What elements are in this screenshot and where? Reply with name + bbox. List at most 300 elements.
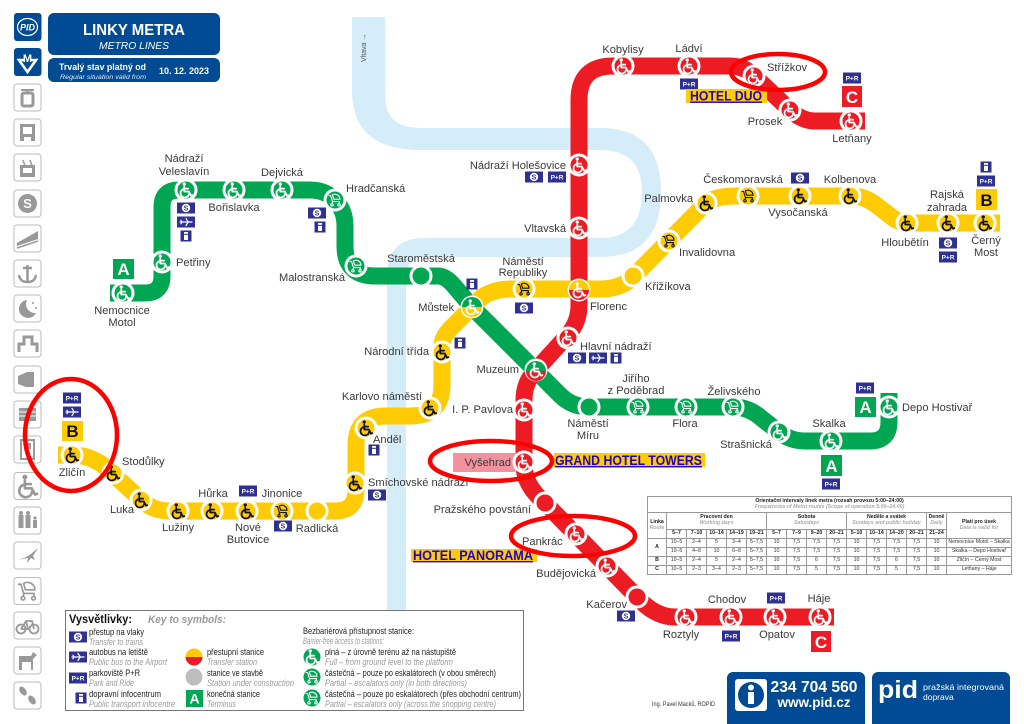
frequency table: 7,5: [913, 539, 920, 545]
tag: info Národní třída: [454, 338, 466, 348]
station: Nádraží Veleslavín: Nádraží: [165, 153, 204, 165]
legend: barrier-free heading: Barrier-free access to stations:: [303, 636, 384, 647]
frequency table: 10: [934, 566, 939, 572]
legend: park and ride: parkoviště P+R: [89, 668, 140, 679]
transfer station: Můstek: Můstek: [418, 302, 454, 314]
metro line C (red): [524, 66, 865, 617]
frequency table: 10–5: [671, 548, 682, 554]
contact box: phone and website: 234 704 560: [770, 679, 858, 696]
sidebar: transport mode icons: [14, 13, 42, 709]
station: Depo Hostivař: Depo Hostivař: [902, 402, 973, 414]
frequency table: 10–5: [671, 557, 682, 563]
frequency table: B: [655, 557, 659, 563]
legend: station under construction: stanice ve stavbě: [207, 668, 263, 679]
frequency table: 10: [854, 557, 859, 563]
icon: ticket machine: [14, 436, 41, 463]
terminus sign: C Háje: [811, 631, 831, 652]
tag: train Veleslavín: [177, 202, 195, 214]
frequency table: Working days: [700, 520, 733, 526]
frequency table: Neděle a svátek: [867, 514, 906, 520]
frequency table: 7,5: [813, 548, 820, 554]
icon: metro: [14, 48, 42, 76]
frequency table: 7,5: [793, 566, 800, 572]
station: Hradčanská: Hradčanská: [346, 183, 406, 195]
tag: P+R Rajská zahrada: [939, 252, 957, 262]
station: Jinonice: [262, 488, 302, 521]
frequency table: 4–8: [692, 548, 701, 554]
station: Pankrác: [522, 524, 586, 548]
station: Kačerov: Kačerov: [586, 599, 627, 611]
hotel label: Hotel Duo: HOTEL DUO: [690, 88, 762, 104]
header: title box: [48, 13, 220, 55]
legend: partial escalators: Partial – escalators only (in both directions): [325, 678, 467, 689]
tag: info Hradčanská: [314, 222, 326, 232]
frequency table: Frequencies of Metro routes (Scope of operation 5:00–24:00): [755, 504, 904, 510]
tag: P+R Skalka: [822, 478, 840, 490]
icon: charging: [14, 366, 41, 393]
icon: ferry anchor: [14, 260, 41, 287]
frequency table: A: [655, 544, 659, 550]
station: Pražského povstání: Pražského povstání: [434, 504, 532, 516]
frequency table: 10: [854, 539, 859, 545]
tag: train Veleslavín: S: [184, 206, 189, 212]
frequency table: Sobota: [798, 514, 815, 520]
station: Vltavská: [524, 218, 589, 238]
frequency table: Data is valid for: [960, 524, 998, 530]
frequency table: Route: [650, 524, 664, 530]
icon: family: [14, 507, 41, 534]
icon: funicular: [14, 225, 41, 252]
tag: airport bus Veleslavín: [177, 216, 195, 228]
tag: P+R Letňany: P+R: [846, 76, 859, 82]
frequency table: 10: [774, 548, 779, 554]
icon: train: S: [23, 196, 32, 211]
station: Náměstí Míru: Náměstí: [567, 418, 610, 430]
frequency table: 3–4: [732, 539, 741, 545]
red circle: Střížkov: [731, 54, 825, 90]
station: Vysočanská: [768, 186, 829, 219]
station: Prosek: Prosek: [748, 116, 783, 128]
frequency table: 5–7,5: [750, 566, 763, 572]
tag: train Náměstí Republiky: S: [522, 306, 527, 312]
legend: full access: Full – from ground level to the platform: [325, 657, 453, 668]
frequency table: 10: [774, 539, 779, 545]
icon: PID logo: [14, 13, 42, 41]
legend: full access: plná – z úrovně terénu až na nástupiště: [325, 647, 456, 658]
tag: P+R Depo Hostivař: P+R: [859, 386, 872, 392]
contact box: phone and website: www.pid.cz: [777, 694, 850, 710]
tag: P+R Skalka: P+R: [825, 482, 838, 488]
station: Střížkov: [744, 62, 808, 86]
frequency table: 21–24: [929, 530, 944, 536]
legend: trains: S: [76, 634, 81, 642]
tag: P+R Holešovice: P+R: [551, 174, 564, 182]
station: Nádraží Veleslavín: [159, 153, 209, 200]
station: Invalidovna: Invalidovna: [679, 247, 736, 259]
legend: airport bus: autobus na letiště: [89, 647, 148, 658]
station: Chodov: [708, 594, 747, 627]
river label: Vltava →: [361, 34, 368, 62]
tag: P+R Ládví: P+R: [683, 82, 696, 88]
station: Zličín: [59, 445, 85, 479]
frequency table: 20–21: [829, 530, 844, 536]
station: Bořislavka: [208, 180, 260, 214]
frequency table: 10–5: [671, 539, 682, 545]
station: Želivského: [707, 385, 761, 417]
station: Anděl: Anděl: [373, 434, 401, 446]
legend: park and ride: P+R: [72, 676, 85, 682]
station: Černý Most: [971, 213, 1001, 259]
frequency table: 9–20: [811, 530, 822, 536]
legend: park and ride: [69, 668, 140, 689]
station: Staroměstská: [387, 253, 456, 286]
station: Kolbenova: Kolbenova: [824, 174, 877, 186]
icon: wheelchair: [14, 472, 41, 500]
tag: P+R Depo Hostivař: [856, 382, 874, 394]
legend: park and ride: Park and Ride: [89, 678, 134, 689]
frequency table: 5–10: [851, 530, 862, 536]
terminus sign: A Nemocnice Motol: [113, 259, 134, 279]
tag: P+R Nové Butovice: P+R: [242, 488, 255, 496]
legend: terminus: A: [189, 690, 200, 706]
icon: steps: [14, 330, 41, 357]
tag: train Hradčanská: [308, 208, 326, 218]
station: Radlická: Radlická: [296, 523, 339, 535]
station: Českomoravská: [703, 173, 784, 206]
station: Náměstí Míru: Míru: [577, 430, 599, 442]
frequency table: 7,5: [793, 548, 800, 554]
station: Bořislavka: Bořislavka: [208, 202, 260, 214]
station: Roztyly: Roztyly: [663, 629, 700, 641]
frequency table: 5–7,5: [750, 557, 763, 563]
river: Vltava: [352, 17, 661, 612]
station: Palmovka: [644, 193, 716, 213]
frequency table: 6: [815, 557, 818, 563]
terminus sign: A Depo Hostivař: A: [859, 398, 872, 417]
legend: terminus: [186, 689, 260, 710]
station: Hradčanská: [325, 183, 406, 210]
station: Smíchovské nádraží: [345, 473, 469, 493]
station: Národní třída: [364, 342, 452, 362]
frequency table: 10: [934, 548, 939, 554]
header: title box: METRO LINES: [99, 40, 169, 52]
frequency table: 3–4: [712, 566, 721, 572]
tag: P+R Letňany: [843, 72, 861, 84]
frequency table: 10–14: [869, 530, 884, 536]
station: Hloubětín: Hloubětín: [881, 237, 929, 249]
tag: P+R Chodov: P+R: [725, 634, 738, 640]
icon: trolleybus: [14, 154, 41, 181]
frequency table: 7,5: [793, 539, 800, 545]
frequency table: Pracovní den: [700, 514, 733, 520]
frequency table: 7,5: [833, 539, 840, 545]
transfer station: Muzeum: [476, 358, 548, 382]
tag: train Hlavní nádraží: [568, 352, 586, 364]
station: Nové Butovice: [227, 501, 269, 546]
tag: P+R Černý Most: [977, 176, 995, 186]
station: Kačerov: [586, 587, 647, 611]
tag: P+R Opatov: [767, 592, 785, 604]
frequency table: 19–21: [749, 530, 764, 536]
frequency table: 10: [934, 539, 939, 545]
station: Nemocnice Motol: [94, 283, 150, 329]
tag: airport bus Zličín: [63, 406, 81, 418]
icon: plane: [14, 542, 41, 569]
icon: night moon: [14, 295, 41, 322]
station: Anděl: [356, 418, 401, 446]
frequency table: 7,5: [873, 566, 880, 572]
icon: tram: [14, 84, 41, 111]
terminus sign: B Černý Most: B: [980, 191, 993, 210]
frequency table: 10: [774, 566, 779, 572]
legend: trains: přestup na vlaky: [89, 627, 144, 638]
station: Stodůlky: Stodůlky: [122, 456, 165, 468]
frequency table: 7,5: [873, 548, 880, 554]
tag: train Kačerov: [617, 610, 635, 622]
station: Opatov: Opatov: [759, 629, 795, 641]
station: Lužiny: [162, 501, 194, 534]
frequency table: 10: [854, 566, 859, 572]
station: Roztyly: [663, 607, 700, 641]
legend: station under construction: [186, 668, 294, 689]
tag: P+R Zličín: [63, 392, 81, 404]
frequency table: 5: [815, 566, 818, 572]
legend: terminus: konečná stanice: [207, 689, 260, 700]
tag: info Černý Most: [980, 162, 992, 172]
station: Skalka: Skalka: [812, 418, 846, 430]
icon: train: [14, 190, 41, 217]
header: validity box: Regular situation valid from: [60, 74, 147, 81]
tag: P+R Nové Butovice: [239, 486, 257, 496]
tag: P+R Rajská zahrada: P+R: [942, 254, 955, 262]
station: Invalidovna: [659, 231, 736, 259]
frequency table: 2–3: [692, 566, 701, 572]
station: Chodov: Chodov: [708, 594, 747, 606]
header: validity box: Trvalý stav platný od: [59, 62, 146, 73]
station: Nemocnice Motol: Nemocnice: [94, 305, 150, 317]
station: Opatov: [759, 607, 795, 641]
red circle: Zličín: [25, 379, 117, 491]
transfer station: Můstek: [418, 296, 484, 318]
station: Skalka: [812, 418, 846, 451]
station: Nové Butovice: Nové: [235, 522, 261, 534]
legend: airport bus: Public bus to the Airport: [89, 657, 167, 668]
frequency table: 7,5: [833, 548, 840, 554]
legend: infocentre: Public transport infocentre: [89, 699, 175, 710]
station: Ládví: [675, 43, 703, 76]
frequency table: Linka: [650, 519, 664, 525]
frequency table: Zličín – Černý Most: [957, 557, 1001, 563]
station: Petřiny: [152, 252, 211, 272]
transfer station: Florenc: [568, 278, 627, 313]
hotel label: Hotel Panorama: HOTEL PANORAMA: [413, 547, 533, 563]
frequency table: Skalka – Depo Hostivař: [952, 548, 1006, 554]
terminus sign: A Depo Hostivař: [855, 397, 876, 417]
metro line A crossing: [472, 307, 536, 371]
legend: key to symbols: [66, 610, 524, 710]
station: Flora: [672, 397, 698, 430]
frequency table: C: [655, 566, 659, 572]
terminus sign: B Zličín: [62, 421, 83, 441]
frequency table: 5: [895, 566, 898, 572]
tag: train Rajská zahrada: S: [946, 240, 951, 248]
frequency table: 7,5: [893, 539, 900, 545]
frequency table: 10–5: [671, 566, 682, 572]
tag: info Anděl: [368, 444, 380, 456]
legend: infocentre: dopravní infocentrum: [89, 689, 161, 700]
frequency table: 7,5: [893, 548, 900, 554]
legend: partial via shopping centre: částečná – pouze po eskalátorech (přes obchodní centrum): [325, 689, 521, 700]
station: Náměstí Republiky: [499, 256, 548, 299]
hotel label: Grand Hotel Towers: GRAND HOTEL TOWERS: [555, 452, 702, 468]
frequency table: 5–7,5: [750, 548, 763, 554]
station: Rajská zahrada: zahrada: [927, 202, 968, 214]
frequency table: 10: [934, 557, 939, 563]
station: Nádraží Holešovice: Nádraží Holešovice: [470, 160, 566, 172]
station: Nádraží Holešovice: [470, 155, 589, 175]
icon: rows: [14, 401, 41, 428]
frequency table: Orientační intervaly linek metra (rozsah provozu 5:00–24:00): [755, 498, 904, 504]
terminus sign: A Nemocnice Motol: A: [117, 260, 130, 279]
station: Smíchovské nádraží: Smíchovské nádraží: [368, 477, 469, 489]
legend: airport bus: [69, 647, 167, 668]
legend: partial via shopping centre: Partial – escalators only (across the shopping centre): [325, 699, 496, 710]
tag: train Jinonice: [274, 520, 292, 532]
tag: airport bus Hlavní nádraží: [589, 352, 607, 364]
terminus sign: C Letňany: C: [846, 88, 858, 107]
legend: barrier-free heading: [303, 626, 414, 647]
terminus sign: A Skalka: [821, 455, 842, 476]
brand box: PID: doprava: [923, 692, 954, 702]
station: Jiřího z Poděbrad: z Poděbrad: [608, 385, 664, 397]
legend: partial escalators: [304, 668, 496, 689]
station: Hlavní nádraží: Hlavní nádraží: [580, 341, 652, 353]
tag: P+R Ládví: [680, 78, 698, 90]
frequency table: 5–7: [772, 530, 781, 536]
station: Vysočanská: Vysočanská: [768, 207, 829, 219]
brand box: PID: pražská integrovaná: [923, 682, 1004, 692]
frequency table: 2–4: [732, 557, 741, 563]
icon: metro: M: [23, 53, 32, 65]
icon: dog: [14, 647, 41, 674]
frequency table: Denně: [929, 514, 944, 520]
station: Černý Most: Černý: [971, 234, 1001, 247]
station: Českomoravská: Českomoravská: [703, 173, 784, 186]
station: Kobylisy: [602, 44, 644, 76]
header: title box: LINKY METRA: [83, 22, 185, 39]
station: Hůrka: [198, 488, 229, 521]
brand box: PID: pid: [878, 676, 918, 704]
station: Národní třída: Národní třída: [364, 346, 430, 358]
tag: train Hradčanská: S: [315, 210, 320, 218]
legend: transfer station: [186, 647, 264, 668]
legend: partial escalators: částečná – pouze po eskalátorech (v obou směrech): [325, 668, 496, 679]
station: Budějovická: [536, 556, 617, 580]
station: Malostranská: Malostranská: [279, 272, 346, 284]
station: Náměstí Republiky: Republiky: [499, 267, 548, 279]
frequency table: 5: [715, 539, 718, 545]
tag: P+R Chodov: [722, 630, 740, 642]
station: Dejvická: Dejvická: [261, 167, 304, 179]
terminus sign: B Zličín: B: [66, 422, 79, 441]
frequency table: 7,5: [913, 566, 920, 572]
tag: train Holešovice: [525, 172, 543, 182]
station: Nové Butovice: Butovice: [227, 534, 269, 546]
frequency table: 10: [714, 548, 719, 554]
tag: P+R Zličín: P+R: [66, 396, 79, 402]
tag: train Smíchovské nádraží: [368, 490, 386, 500]
station: Hloubětín: [881, 213, 929, 249]
tag: train Českomoravská: [791, 172, 809, 184]
tag: train Kačerov: S: [624, 614, 629, 620]
tag: info Veleslavín: [180, 230, 192, 242]
station: Vyšehrad: [465, 452, 534, 472]
highlight: Vyšehrad: [453, 453, 515, 472]
terminus sign: B Černý Most: [976, 189, 997, 210]
station: Luka: [110, 490, 151, 516]
station: Flora: Flora: [672, 418, 698, 430]
brand box: PID: [872, 672, 1010, 724]
terminus sign: C Háje: C: [815, 633, 827, 652]
frequency table: Letňany – Háje: [962, 566, 996, 572]
icon: PID logo: PID: [20, 22, 35, 32]
frequency table: 7–9: [792, 530, 801, 536]
station: Kobylisy: Kobylisy: [602, 44, 644, 56]
station: Radlická: [296, 501, 339, 535]
credit: Ing. Pavel Macků, ROPID: [652, 701, 716, 708]
station: Hlavní nádraží: [558, 328, 652, 353]
station: I. P. Pavlova: [452, 400, 534, 420]
frequency table: Nemocnice Motol – Skalka: [948, 539, 1010, 545]
station: Vltavská: Vltavská: [524, 223, 567, 235]
station: Rajská zahrada: Rajská: [930, 189, 965, 201]
station: Pražského povstání: [434, 493, 555, 516]
legend: terminus: Terminus: [207, 699, 236, 710]
icon: stroller: [14, 578, 41, 604]
tag: train Náměstí Republiky: [515, 302, 533, 314]
station: I. P. Pavlova: I. P. Pavlova: [452, 404, 514, 416]
legend heading: Vysvětlivky:: [69, 614, 132, 626]
frequency table: 2–3: [732, 566, 741, 572]
station: Pankrác: Pankrác: [522, 536, 563, 548]
legend: infocentre: [76, 689, 175, 710]
metro line A (green): [110, 190, 889, 441]
frequency table: [647, 496, 1012, 575]
metro line B (yellow): [58, 196, 1000, 511]
station: Lužiny: Lužiny: [162, 522, 194, 534]
frequency table: 14–20: [889, 530, 904, 536]
station: Želivského: Želivského: [707, 385, 761, 398]
station: Háje: Háje: [808, 593, 830, 605]
icon: bus: [14, 119, 41, 146]
terminus sign: A Skalka: A: [825, 457, 838, 476]
legend: barrier-free heading: Bezbariérová přístupnost stanice:: [303, 626, 414, 637]
legend: station under construction: Station under construction: [207, 678, 294, 689]
station: Karlovo náměstí: Karlovo náměstí: [342, 391, 423, 403]
frequency table: Sundays and public holiday: [852, 520, 921, 526]
transfer station: Florenc: Florenc: [590, 301, 627, 313]
frequency table: 2–4: [692, 539, 701, 545]
legend: transfer station: Transfer station: [207, 657, 257, 668]
contact box: phone and website: [727, 672, 865, 724]
station: Strašnická: [720, 422, 789, 451]
tag: train Holešovice: S: [532, 174, 537, 182]
station: Rajská zahrada: [927, 189, 968, 233]
station: Křižíkova: [623, 266, 691, 293]
red circle: Pankrác: [511, 516, 635, 556]
frequency table: 10–14: [709, 530, 724, 536]
station: Hůrka: Hůrka: [198, 488, 229, 500]
